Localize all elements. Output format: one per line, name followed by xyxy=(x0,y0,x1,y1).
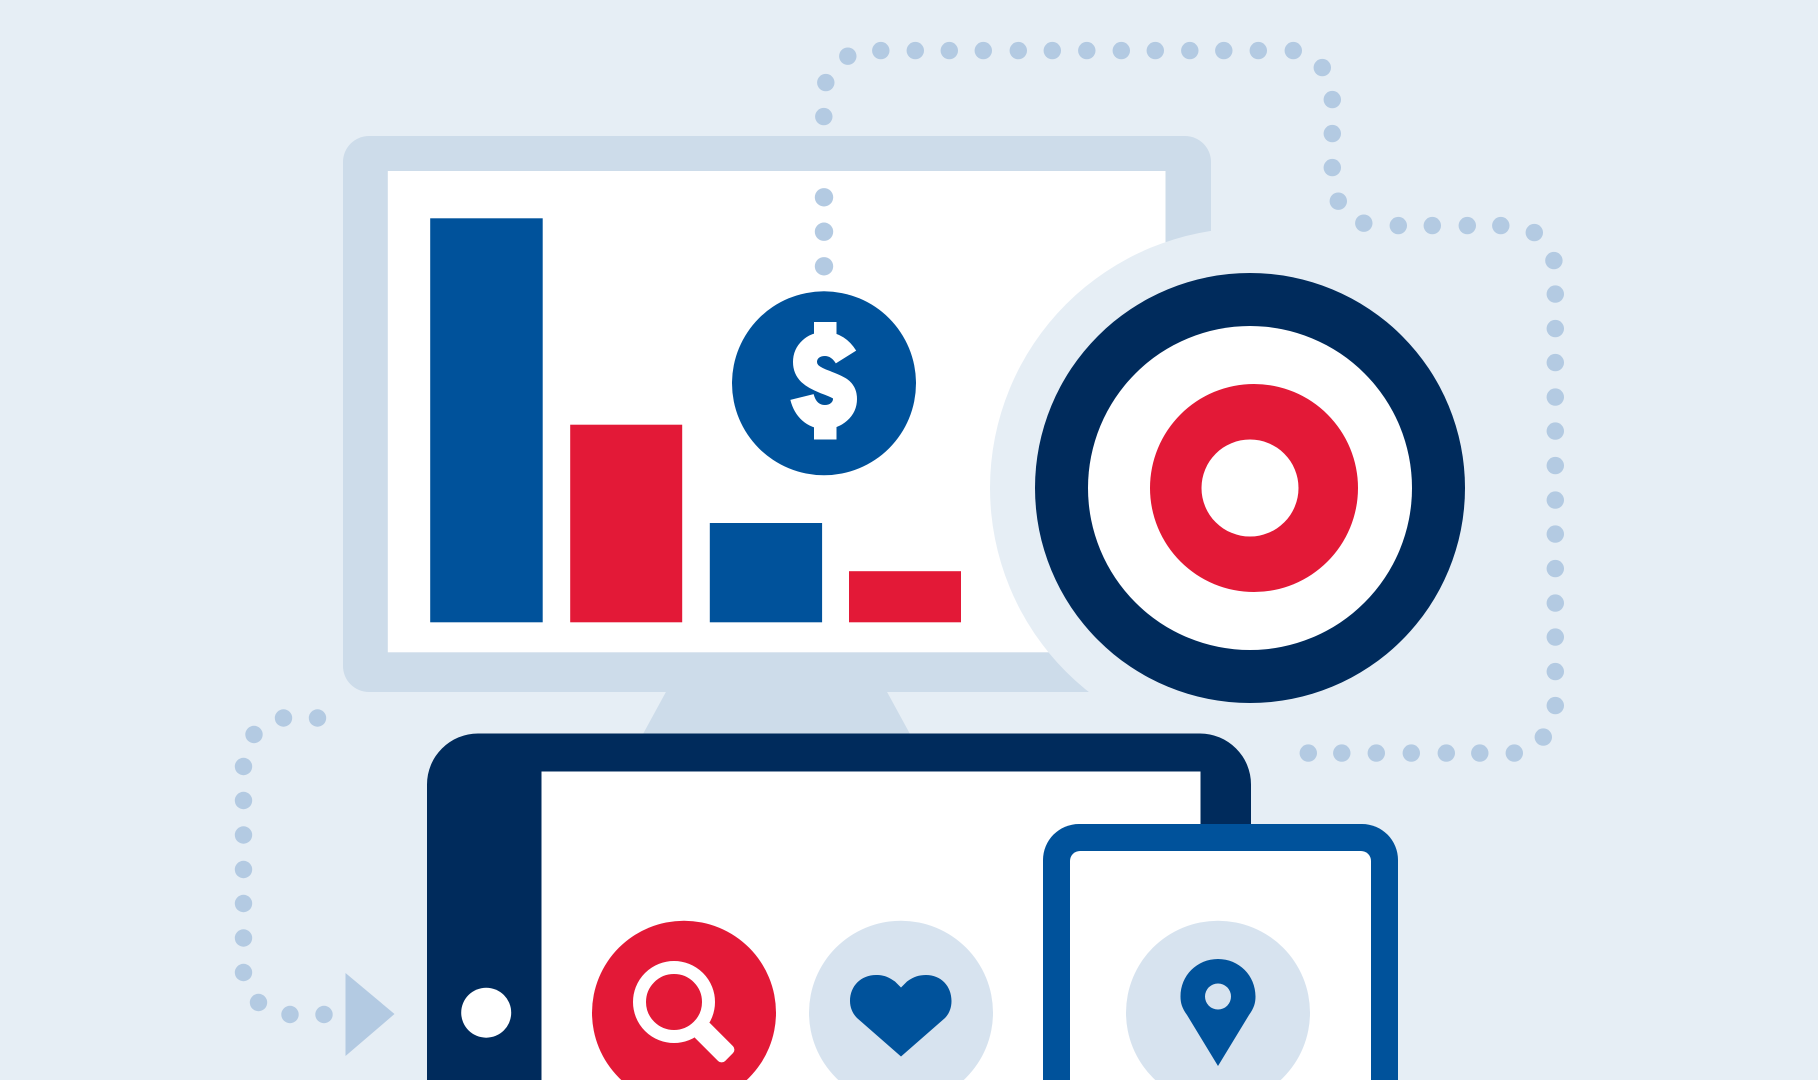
phone xyxy=(1043,824,1398,1080)
icon: target xyxy=(1035,273,1465,703)
icon: heart on pale circle xyxy=(809,921,993,1080)
dotted path: left loop with arrow xyxy=(235,709,394,1056)
tablet screen xyxy=(542,772,1200,1080)
tablet body xyxy=(427,734,1251,1080)
icon: magnifying glass on red circle xyxy=(592,921,776,1080)
target halo xyxy=(990,228,1510,748)
dotted path: into dollar coin xyxy=(815,188,833,275)
bar chart xyxy=(430,218,961,622)
monitor screen xyxy=(388,171,1166,652)
tablet xyxy=(427,734,1251,1080)
phone screen xyxy=(1070,851,1371,1080)
phone body xyxy=(1043,824,1398,1080)
icon: dollar coin xyxy=(732,291,916,475)
tablet home button xyxy=(461,988,511,1038)
monitor frame xyxy=(343,136,1211,692)
icon: location pin on pale circle xyxy=(1126,921,1310,1080)
dotted path: top right loop xyxy=(815,42,1564,762)
monitor xyxy=(343,136,1211,734)
monitor stand xyxy=(643,690,910,734)
